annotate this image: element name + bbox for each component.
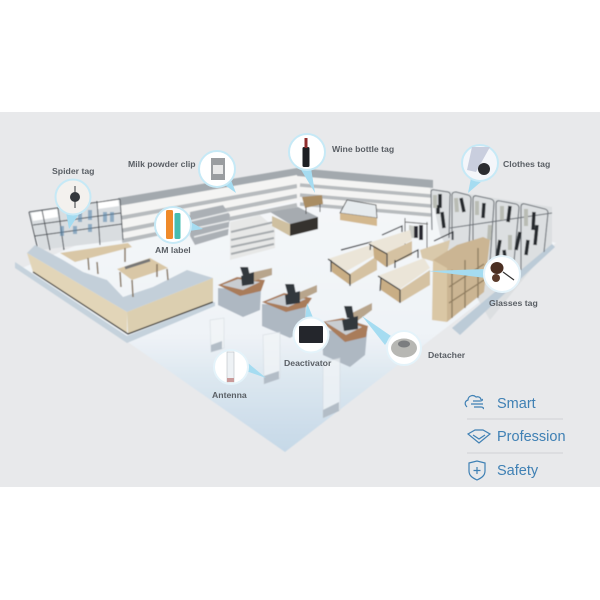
callout: antenna [212,350,266,400]
store scene [15,168,556,452]
callout: deactivator: Deactivator [284,358,332,368]
callout: glasses tag [428,256,538,308]
legend: safety [469,461,539,480]
callout: milk powder clip: Milk powder clip [128,159,196,169]
glass case [340,200,377,226]
small rack [405,218,428,250]
callout: milk powder clip [128,151,236,193]
callout: AM label: AM label [155,245,191,255]
display tables [60,243,168,297]
callout: wine bottle tag [289,134,394,193]
icon: cloud [465,396,483,409]
callout: glasses tag: Glasses tag [489,298,538,308]
callout: antenna: Antenna [212,390,247,400]
background band [0,112,600,487]
legend: profession: Profession [497,429,566,445]
callout: AM label [155,207,203,255]
callout: detacher: Detacher [428,350,466,360]
callout: spider tag: Spider tag [52,166,94,176]
legend: safety: Safety [497,463,539,479]
centre gondolas [190,205,275,260]
icon: shield [469,461,485,480]
clothing racks [430,188,555,335]
callout: deactivator [284,303,332,368]
icon: diamond [468,430,490,443]
checkout 1 [218,267,272,317]
island display [270,207,318,236]
callout: detacher [362,316,466,365]
black-framed tables [328,226,453,303]
store floor [22,190,556,452]
callout: clothes tag: Clothes tag [503,159,550,169]
legend: smart [465,396,536,412]
rear wood display [302,195,323,214]
legend: smart: Smart [497,396,536,412]
callout: wine bottle tag: Wine bottle tag [332,144,394,154]
callout: clothes tag [462,145,550,193]
wood cabinet wall [432,237,490,322]
left counter [15,245,215,343]
checkout 2 [262,284,317,338]
callout: spider tag [52,166,94,229]
checkout 3 [322,303,372,367]
back wall shelves [118,168,433,244]
left tall shelving [29,199,123,250]
antenna gates [210,318,340,418]
